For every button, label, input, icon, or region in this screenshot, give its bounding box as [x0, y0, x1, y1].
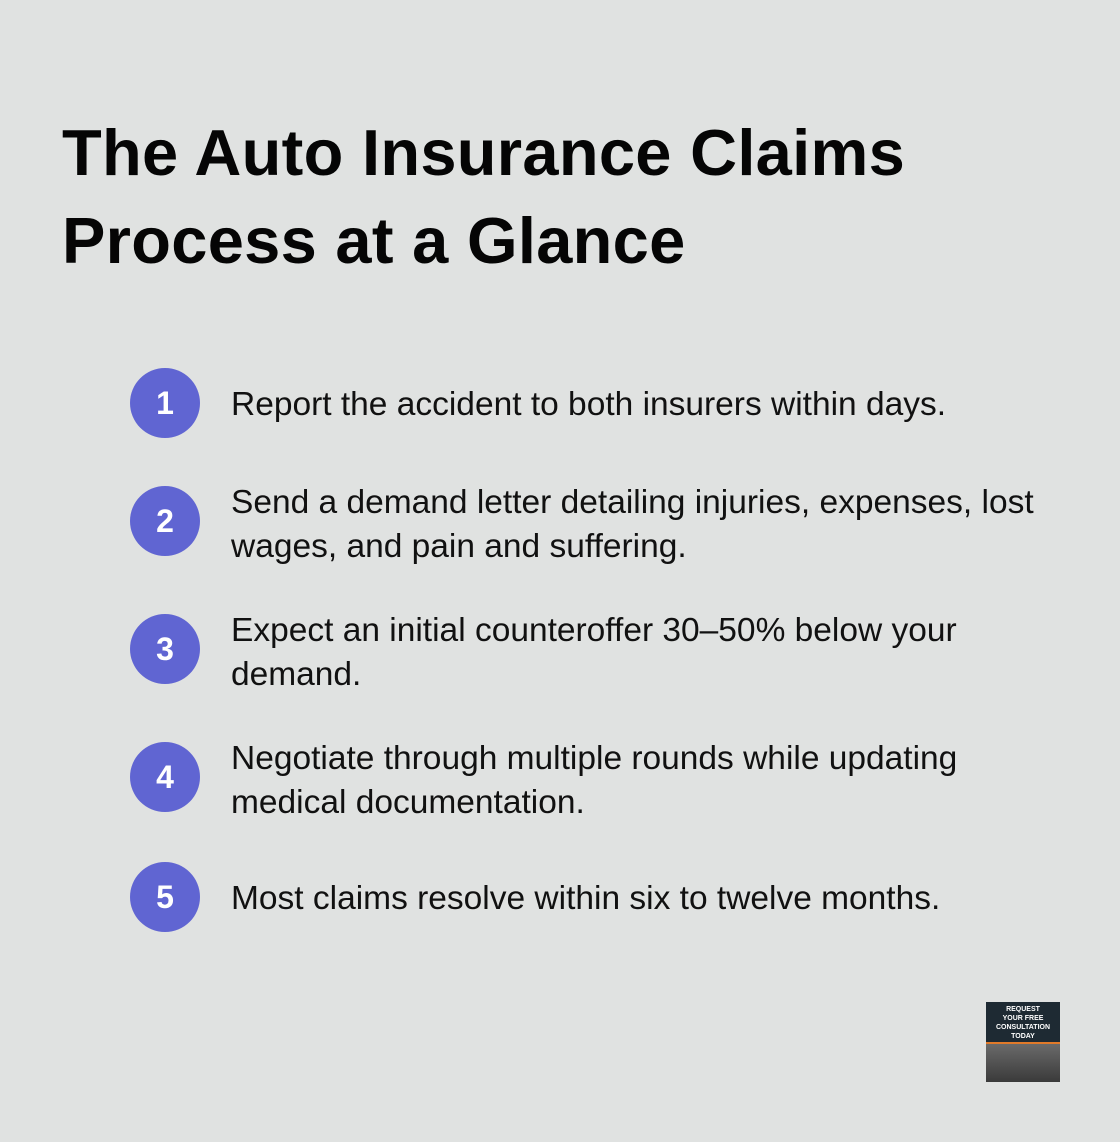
title: The Auto Insurance Claims [62, 116, 905, 189]
logo: consultation badge: REQUEST [1006, 1006, 1040, 1013]
step 3: Expect an initial counteroffer 30–50% below your [231, 612, 957, 649]
step 2: 2 [156, 503, 174, 539]
step 1: Report the accident to both insurers within days. [231, 386, 946, 423]
step 5 [130, 862, 940, 932]
step 5: Most claims resolve within six to twelve months. [231, 880, 940, 917]
step 3 [130, 612, 957, 693]
step 4: medical documentation. [231, 784, 585, 821]
logo: consultation badge: CONSULTATION [996, 1024, 1050, 1031]
logo: consultation badge: YOUR FREE [1003, 1015, 1043, 1022]
title: Process at a Glance [62, 204, 686, 277]
step 1 [130, 368, 946, 438]
step 4: 4 [156, 759, 174, 795]
title [62, 116, 905, 277]
step 4: Negotiate through multiple rounds while updating [231, 740, 957, 777]
step 5: 5 [156, 879, 174, 915]
step 3: 3 [156, 631, 174, 667]
logo: consultation badge: TODAY [1011, 1033, 1035, 1040]
step 2: Send a demand letter detailing injuries, expenses, lost wages, and pain and suffering. [231, 484, 1034, 565]
step 3: demand. [231, 656, 361, 693]
step 4 [130, 740, 957, 821]
step 1: 1 [156, 385, 174, 421]
logo: consultation badge [986, 1002, 1060, 1082]
